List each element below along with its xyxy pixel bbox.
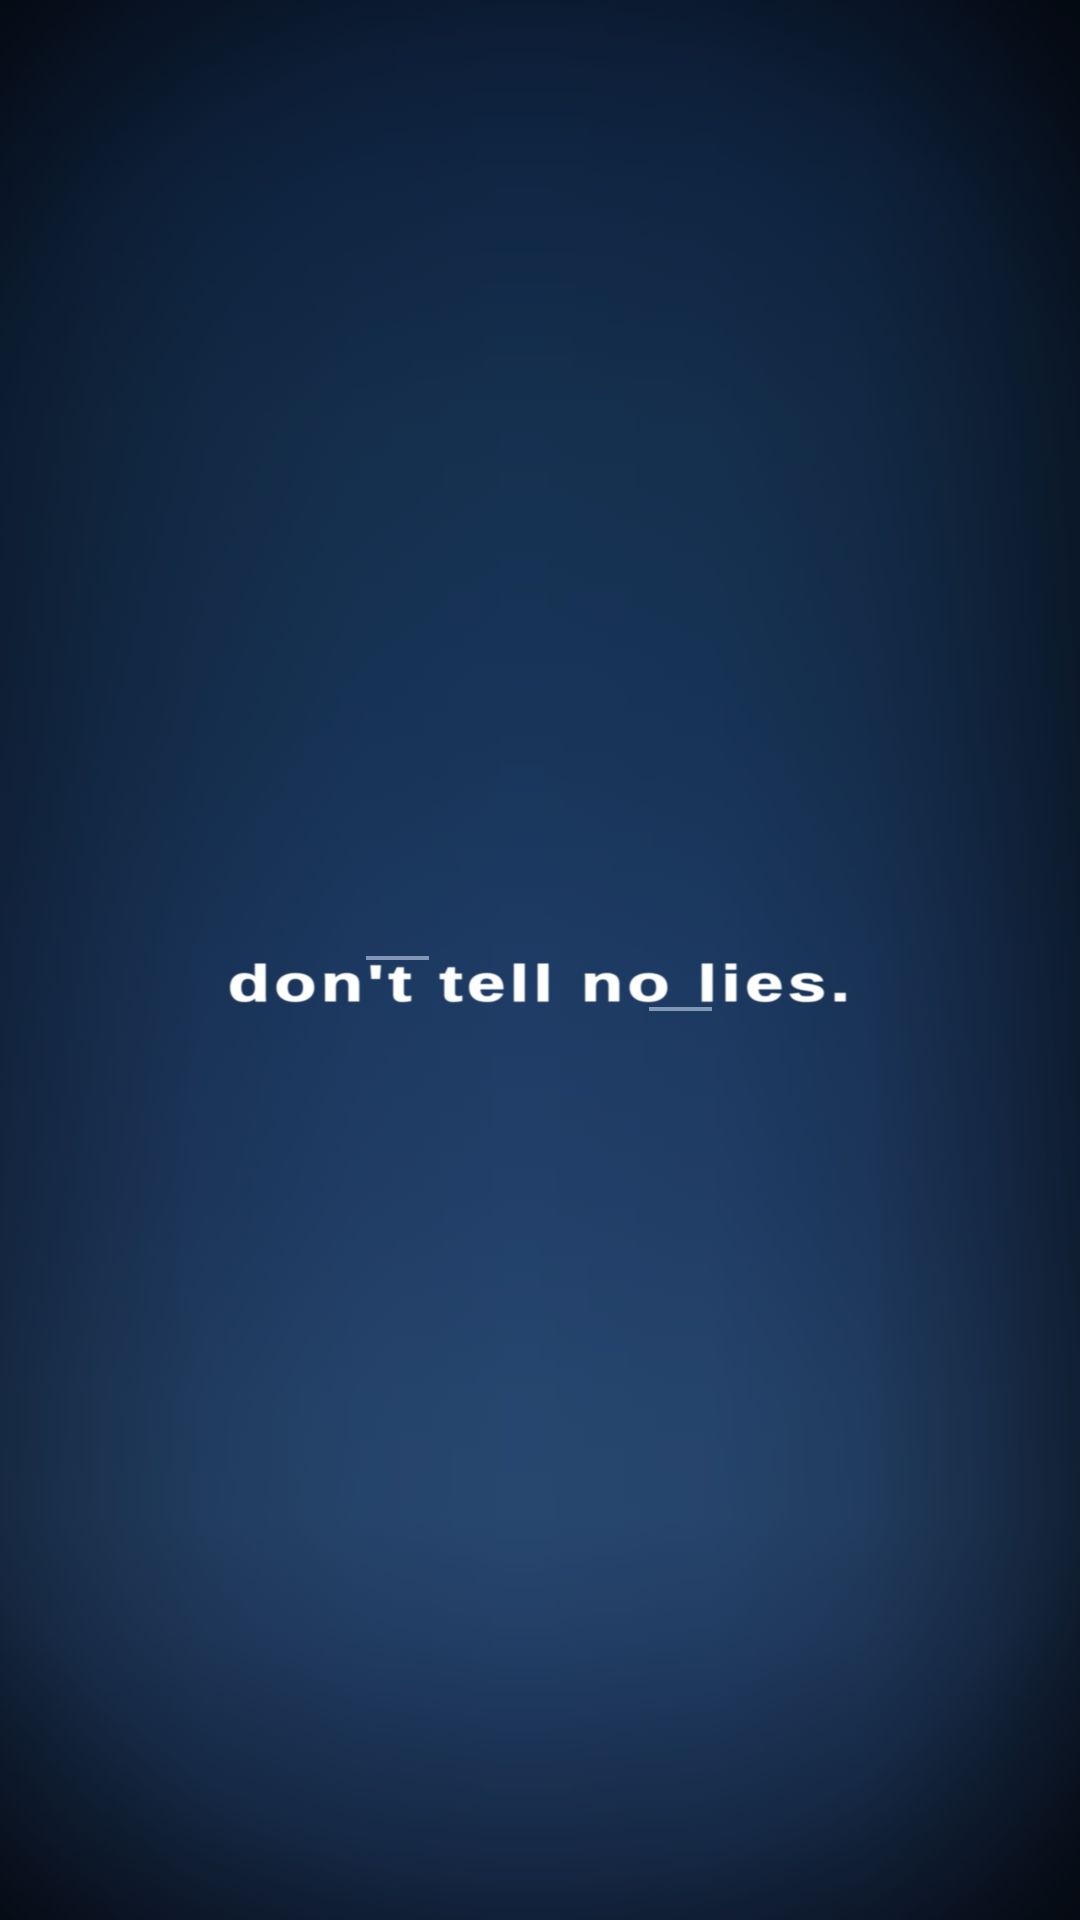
headline text: don't tell no lies. [228, 954, 850, 1012]
accent line below [649, 1007, 712, 1011]
accent line above [366, 956, 429, 960]
